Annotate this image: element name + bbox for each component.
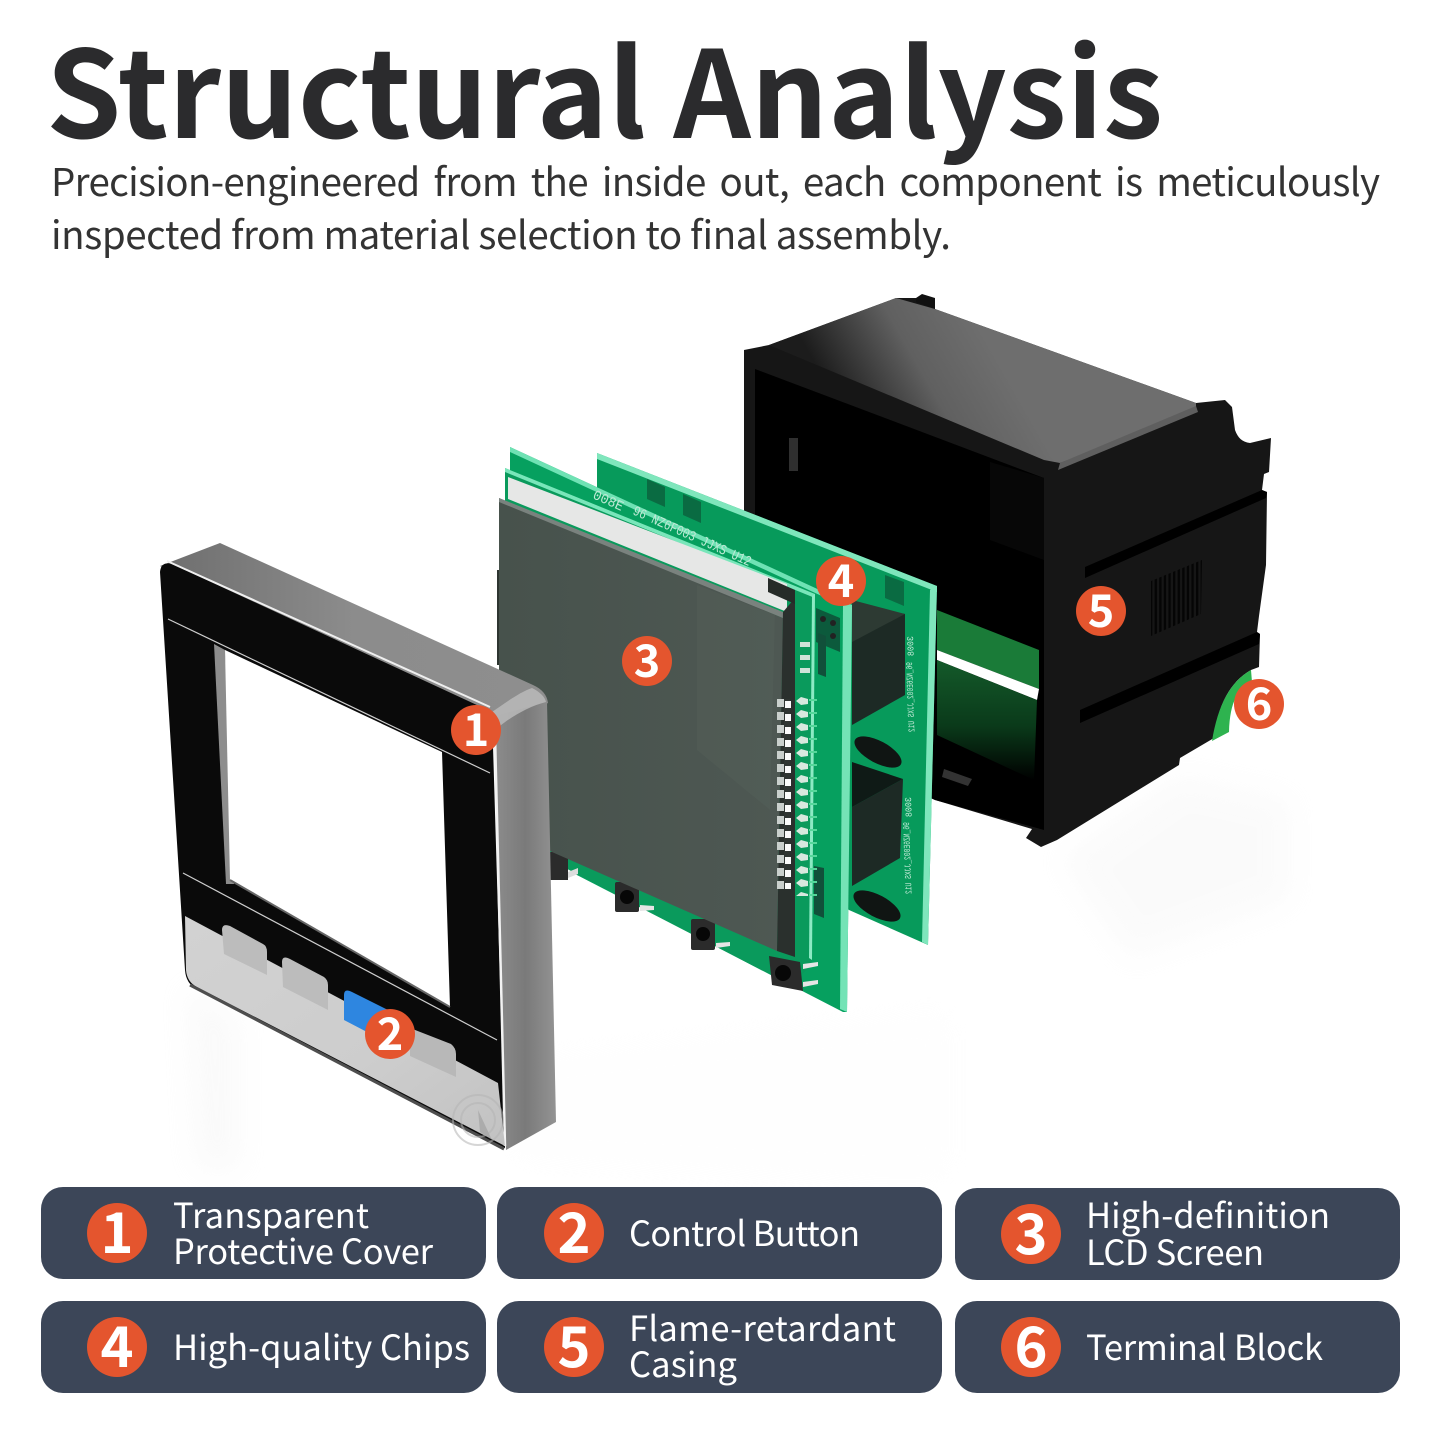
- subtitle text: [51, 152, 1380, 261]
- lcd pin row: [777, 699, 794, 889]
- front board top edge: [505, 468, 815, 598]
- legend card 1: Protective Cover: [173, 1224, 434, 1274]
- vertical pcb markings: 96_NZ6E002_JJXS U12: [902, 822, 915, 894]
- vertical pcb markings: 3008: [906, 636, 917, 656]
- legend card 3: [955, 1188, 1400, 1280]
- badge 2: 2: [377, 998, 403, 1063]
- legend card 2: [497, 1187, 942, 1279]
- badge 5: 5: [1088, 575, 1114, 640]
- mounting tab: [916, 294, 935, 309]
- legend card 6: 6: [1014, 1303, 1048, 1384]
- badge 1: 1: [463, 694, 489, 759]
- silver button panel: [185, 916, 505, 1146]
- legend card 3: High-definition: [1086, 1188, 1330, 1238]
- crystal lower: [849, 884, 905, 928]
- casing side and front body: [744, 298, 1271, 847]
- subtitle text: Precision-engineered from the inside out, each component is meticulously: [51, 152, 1380, 208]
- legend card 5: 5: [557, 1303, 591, 1384]
- relay upper: [852, 604, 905, 725]
- thin line lower: [183, 873, 497, 1040]
- front circuit board: [505, 468, 826, 985]
- frame top face: [160, 543, 548, 728]
- front board right edge: [809, 594, 815, 960]
- board markings: [590, 488, 753, 571]
- legend card 4: [41, 1301, 486, 1393]
- legend card 1: 1: [100, 1189, 134, 1270]
- interior top shelf: [990, 462, 1044, 560]
- title: Structural Analysis: [46, 0, 1163, 173]
- badge 6: 6: [1246, 668, 1272, 733]
- floor reflections: [186, 775, 1290, 1180]
- middle board right edge: [840, 605, 852, 1012]
- legend card 6: [955, 1301, 1400, 1393]
- badge 6: [1234, 668, 1284, 733]
- callout badges on product: [365, 545, 1284, 1063]
- legend card 2: 2: [557, 1189, 591, 1270]
- legend card 5: Casing: [629, 1337, 737, 1387]
- top edge highlight: [1058, 406, 1198, 470]
- casing interior: [755, 369, 1044, 830]
- vertical pcb markings: 3008: [904, 797, 915, 817]
- interior white gap: [937, 650, 1039, 700]
- middle board header: [816, 608, 840, 652]
- subtitle text: inspected from material selection to final assembly.: [51, 205, 951, 261]
- badge 3: 3: [634, 625, 660, 690]
- tactile switches: [548, 852, 818, 991]
- button 2: [282, 958, 328, 1010]
- casing vent: [1151, 560, 1202, 636]
- lcd right dark edge: [777, 598, 795, 957]
- blue button: [344, 991, 392, 1032]
- switch 2: [615, 882, 654, 912]
- back circuit board: [597, 453, 937, 945]
- top highlight: [167, 561, 490, 707]
- board connector top left: [647, 479, 904, 606]
- frame side face: [495, 702, 556, 1150]
- lcd screen: [497, 498, 795, 957]
- badge 4: [816, 545, 866, 610]
- legend card 5: [497, 1301, 942, 1393]
- relay lower: [852, 779, 903, 886]
- casing: [744, 294, 1271, 847]
- legend card 6: Terminal Block: [1086, 1320, 1323, 1370]
- interior floor latch: [942, 769, 972, 786]
- window lower edge: [230, 880, 450, 1007]
- lcd left teeth: [497, 570, 501, 665]
- frame front plate: [160, 563, 505, 1148]
- legend card 4: 4: [100, 1303, 134, 1384]
- middle board chip upper: [818, 633, 826, 677]
- thin line upper: [168, 619, 490, 773]
- middle circuit board: [510, 447, 852, 1012]
- legend card 3: LCD Screen: [1086, 1225, 1264, 1275]
- connector pads: [796, 696, 826, 896]
- legend card 3: 3: [1014, 1190, 1048, 1271]
- interior green strip: [937, 610, 1039, 689]
- button 4: [410, 1028, 456, 1077]
- right highlight: [495, 735, 505, 1146]
- window bevel: [214, 644, 234, 884]
- frame window: [225, 650, 450, 1007]
- front cover frame: [160, 543, 556, 1150]
- interior lower green: [937, 660, 1037, 780]
- terminal block: [1212, 670, 1252, 741]
- switch 4: [769, 956, 818, 991]
- legend card 2: Control Button: [629, 1206, 860, 1256]
- badge 4: 4: [828, 545, 854, 610]
- lcd corner: [768, 578, 795, 604]
- corner highlight: [492, 688, 546, 726]
- backlight plate: [508, 477, 787, 612]
- middle board chip lower: [814, 866, 824, 918]
- badge 5: [1076, 575, 1126, 640]
- legend card 1: Transparent: [173, 1188, 369, 1238]
- interior side bar: [789, 438, 798, 471]
- button 1: [222, 925, 267, 975]
- vertical pcb markings: [902, 636, 917, 894]
- badge 2: [365, 998, 415, 1063]
- vertical pcb markings: 96_NZ6E002_JJXS U12: [905, 662, 917, 732]
- board markings: 96 NZ6F003 JJXS U12: [630, 504, 753, 571]
- board markings: 008E: [590, 488, 626, 516]
- switch 1: [548, 852, 578, 880]
- bottom edge: [190, 985, 504, 1149]
- logo mark: [453, 1095, 503, 1145]
- casing lower slot: [1080, 632, 1260, 723]
- switch 3: [691, 919, 730, 950]
- crystal upper: [850, 730, 906, 774]
- lcd reflection: [697, 585, 775, 810]
- legend card 4: High-quality Chips: [173, 1320, 470, 1370]
- board edge: [597, 453, 937, 592]
- badge 1: [451, 694, 501, 759]
- badge 3: [622, 625, 672, 690]
- casing top face: [769, 298, 1196, 463]
- lcd top edge: [499, 498, 783, 618]
- upper pads: [800, 642, 810, 673]
- legend card 5: Flame-retardant: [629, 1301, 896, 1351]
- legend card 1: [41, 1187, 486, 1279]
- middle board top edge: [510, 447, 852, 610]
- casing upper slot: [1085, 490, 1267, 578]
